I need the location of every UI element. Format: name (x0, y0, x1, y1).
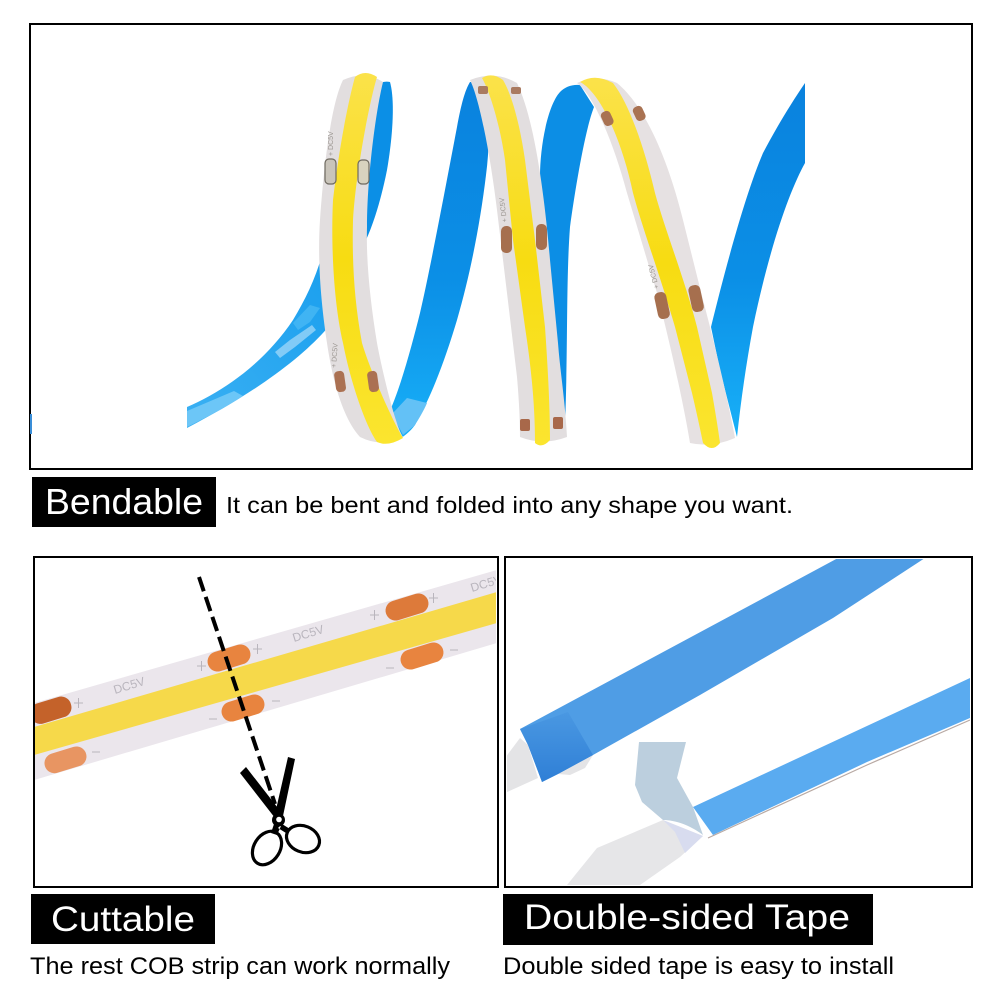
printed polarity marks (74, 593, 458, 752)
printed label: + DC5V (331, 343, 340, 368)
strip body (34, 570, 497, 780)
printed label: + DC5V (648, 263, 661, 289)
strip segment 2 (470, 75, 567, 445)
blue backing: third span (540, 85, 594, 425)
printed label: + DC5V (499, 197, 509, 223)
strip segment 1 (319, 73, 403, 444)
blue backing: first loop behind (355, 82, 393, 240)
icon: scissors (240, 757, 324, 870)
solder pads: copper (334, 370, 346, 393)
heading: Cuttable: Cuttable (51, 900, 195, 939)
printed label: + DC5V (328, 131, 335, 156)
panel: double-sided tape photo (505, 557, 972, 887)
copper pads (35, 696, 72, 724)
panel: cuttable strip photo: DC5V (469, 572, 503, 595)
blue backing: right span (711, 83, 805, 437)
strip edge line (708, 720, 970, 838)
blue backing: tail (187, 255, 330, 428)
text: tape description: Double sided tape is easy to install (503, 953, 894, 980)
panel: cuttable strip photo: DC5V (291, 622, 325, 645)
panel: bendable strip photo (30, 24, 972, 469)
blue backing: second span (388, 82, 489, 440)
cut line (199, 577, 275, 804)
text: bendable description: It can be bent and folded into any shape you want. (226, 492, 793, 518)
panel: cuttable strip photo (28, 557, 503, 887)
text: cuttable description: The rest COB strip can work normally (30, 953, 450, 980)
lower strip white end (567, 820, 684, 885)
upper blue tape (520, 558, 925, 782)
upper strip white end (505, 738, 538, 793)
heading: Double-sided Tape: Double-sided Tape (524, 898, 850, 937)
blue speck at panel edge (30, 414, 32, 434)
heading: Cuttable (31, 894, 215, 944)
strip segment 3 (577, 78, 735, 448)
light patch on backing (392, 398, 427, 435)
heading: Double-sided Tape (503, 894, 873, 945)
heading: Bendable: Bendable (45, 481, 203, 522)
printed DC5V labels: DC5V (112, 674, 146, 697)
yellow phosphor band (34, 592, 497, 755)
solder pads: silver (325, 159, 336, 184)
peeled liner (635, 742, 703, 835)
heading: Bendable (32, 477, 216, 527)
tail printed marks (187, 391, 243, 427)
lower blue tape (693, 678, 970, 835)
